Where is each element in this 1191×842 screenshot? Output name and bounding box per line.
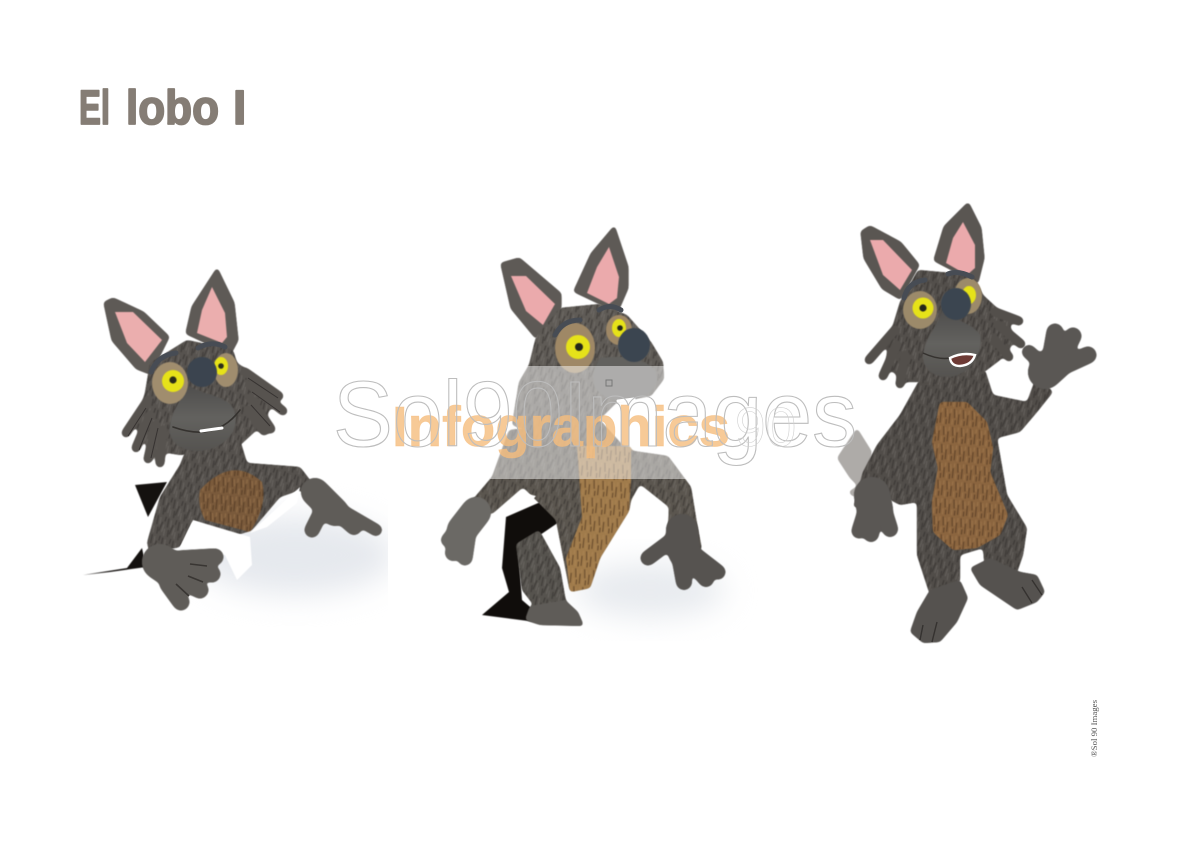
muzzle [170, 385, 236, 451]
watermark: Sol90Images outline: Sol90Images [333, 362, 857, 466]
watermark: small square [606, 380, 612, 386]
paper shadow [195, 515, 395, 595]
nose [187, 357, 217, 387]
eyes [903, 278, 982, 329]
mouth [923, 353, 975, 366]
body [853, 370, 1053, 595]
ears [502, 228, 627, 337]
wolf 1: emerging from torn paper [83, 270, 395, 602]
muzzle [923, 310, 981, 377]
torn hole [83, 482, 167, 575]
head fur [126, 340, 283, 463]
muzzle [593, 357, 657, 401]
paper shadow [575, 562, 725, 618]
head fur [869, 270, 1021, 384]
wolf 2: climbing out of the paper [448, 228, 725, 626]
wolf 3: standing and waving [837, 204, 1088, 643]
infographic canvas [80, 88, 1099, 757]
tail [837, 428, 872, 498]
title: lobo [126, 82, 219, 135]
right hand [648, 530, 718, 582]
leg [516, 530, 584, 626]
copyright credit: ®Sol 90 Images [1090, 700, 1099, 757]
toe creases [920, 580, 1042, 642]
torn hole [482, 500, 562, 622]
watermark: inner 90 outline: 90 [735, 396, 796, 458]
front hand [160, 557, 215, 602]
belly [932, 402, 1008, 550]
right hand [312, 492, 376, 530]
eyes [152, 353, 238, 404]
small paper flap [507, 492, 536, 513]
front hand finger creases [176, 564, 207, 596]
eyes [555, 315, 632, 373]
waving hand [1029, 332, 1088, 372]
mane strand lines [128, 378, 280, 458]
feet [910, 558, 1045, 643]
lower hand [859, 495, 890, 534]
mouth [173, 410, 240, 432]
nose [618, 328, 650, 362]
eyebrows [904, 273, 972, 298]
left hand [448, 512, 476, 558]
ears [862, 204, 983, 298]
torso and arms [458, 420, 702, 592]
tooth [618, 399, 634, 401]
ears [105, 270, 237, 373]
watermark: Infographics: Infographics [392, 395, 730, 458]
paper flaps [180, 487, 300, 580]
nose [941, 288, 971, 320]
title: El [79, 82, 110, 135]
eyebrows [151, 344, 225, 372]
title [79, 82, 246, 135]
title: I [233, 82, 246, 135]
watermark: translucent band [490, 366, 692, 479]
eyebrows [555, 306, 621, 335]
head fur [512, 304, 664, 446]
body and arm [147, 440, 340, 553]
